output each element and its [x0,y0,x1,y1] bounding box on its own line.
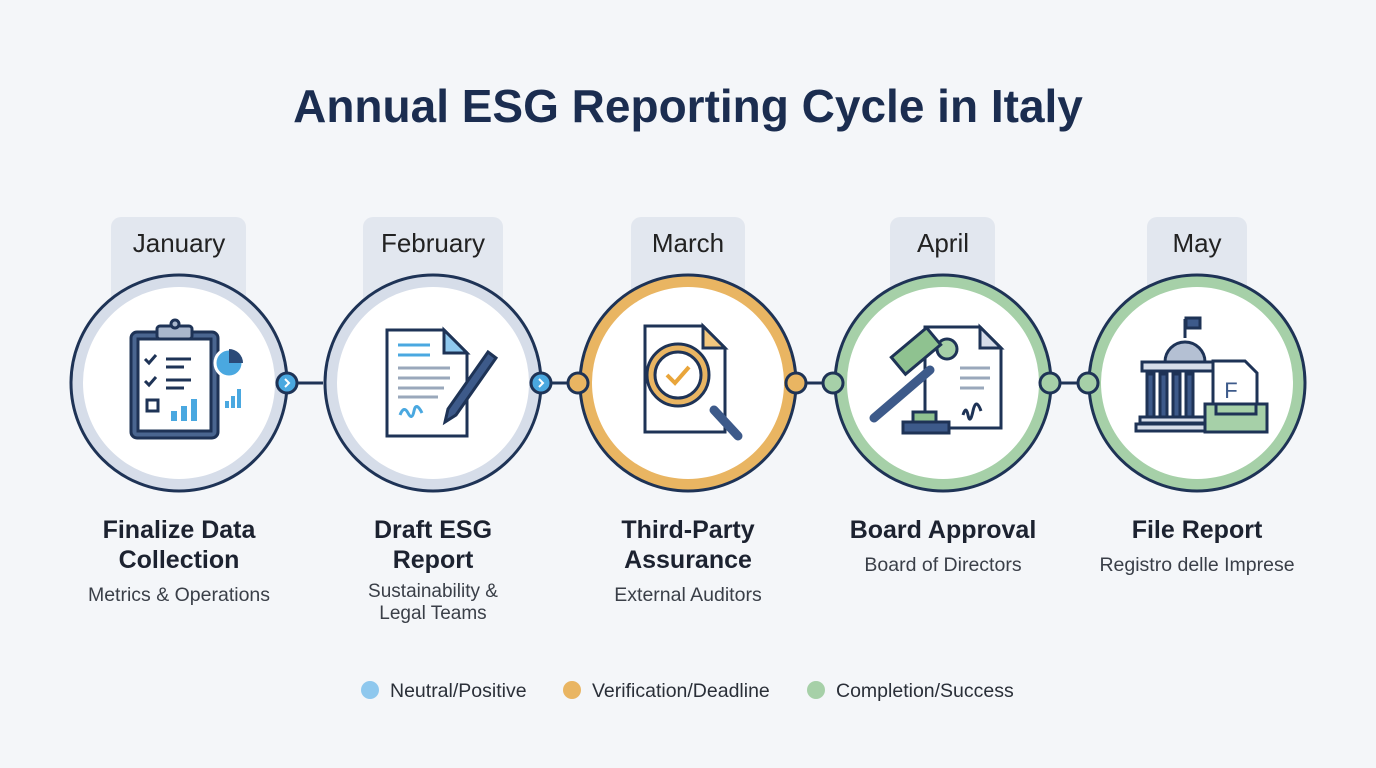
month tab [1147,217,1247,307]
step 2: February [325,217,541,624]
step text: Legal Teams [379,603,487,624]
month tab: January [133,228,225,258]
icon: document and pen [387,330,496,436]
step text: Report [393,546,474,574]
step text: Board Approval [850,516,1036,544]
step text: File Report [1132,516,1263,544]
title: Annual ESG Reporting Cycle in Italy [293,80,1083,132]
connector lines [289,382,1088,384]
step text: Finalize Data [103,516,257,544]
legend: Verification/Deadline [592,680,770,702]
step text [1099,516,1295,576]
step 5: May [1089,217,1305,576]
step text: Metrics & Operations [88,584,270,606]
legend [361,680,1014,702]
month tab [363,217,503,307]
legend: Completion/Success [836,680,1014,702]
connector nodes [277,373,1098,393]
step text: Registro delle Imprese [1099,554,1295,576]
icon: clipboard [131,320,243,438]
step text: External Auditors [614,584,762,606]
step text: Draft ESG [374,516,492,544]
step text [850,516,1036,576]
step text [614,516,762,606]
step text: Collection [119,546,239,574]
month tab [631,217,745,307]
month tab: April [917,228,969,258]
month tab [890,217,995,307]
step text: Sustainability & [368,581,498,602]
icon: government building with file [1136,318,1267,432]
month tab: February [381,228,485,258]
month tab: May [1172,228,1222,258]
month tab: March [652,228,724,258]
icon: gavel and document [874,327,1001,433]
icon: magnifier [645,326,738,436]
step text: Third-Party [621,516,755,544]
step 1: January [71,217,287,606]
step 5: May: F [1224,378,1238,403]
month tab [111,217,246,307]
step text [368,516,498,624]
step text: Board of Directors [864,554,1022,576]
step text: Assurance [624,546,752,574]
step 3: March [580,217,796,606]
legend: Neutral/Positive [390,680,527,702]
step text [88,516,270,606]
step 4: April [835,217,1051,576]
